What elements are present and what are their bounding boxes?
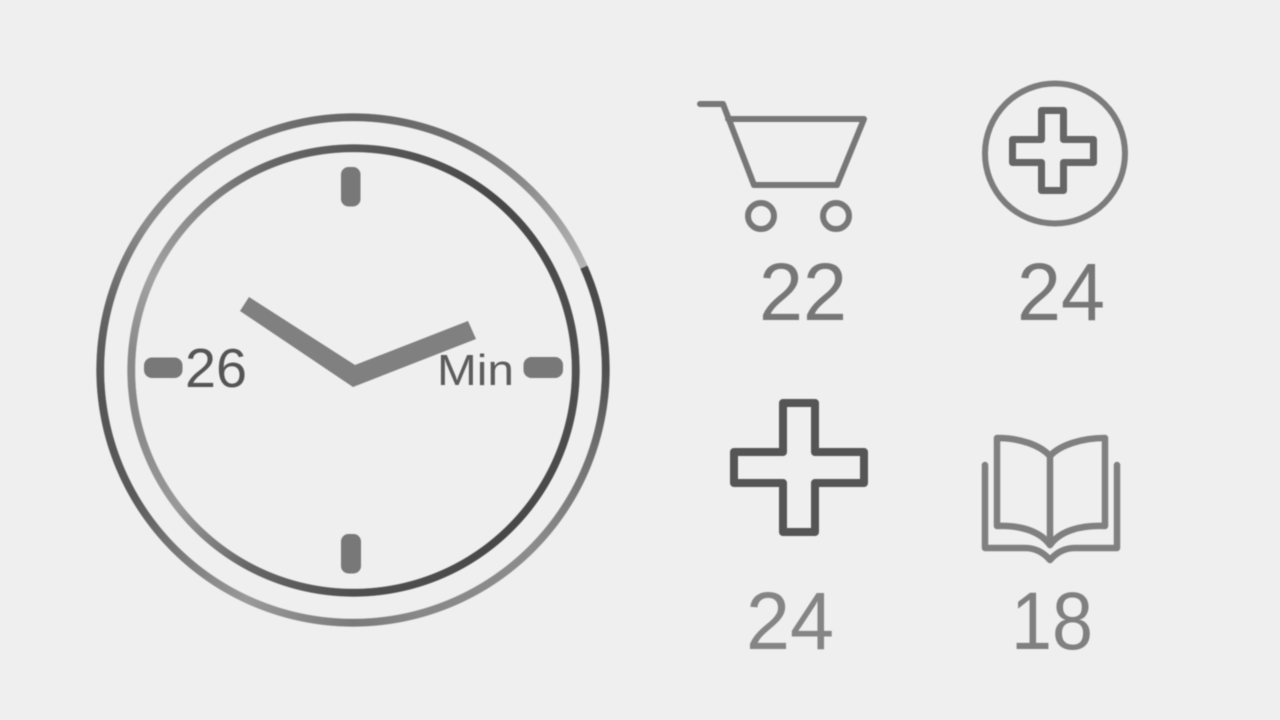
clock hands	[240, 297, 476, 387]
clock	[96, 112, 610, 628]
icon: shopping cart	[700, 104, 864, 229]
clock inner ring	[126, 144, 580, 596]
label: 26: 26	[185, 337, 247, 399]
value: 18: 18	[1011, 576, 1093, 667]
value: 22: 22	[759, 247, 847, 338]
value: 24 bottom: 24	[746, 576, 834, 667]
hour ticks	[144, 167, 563, 574]
icon: open book	[985, 438, 1117, 560]
label: Min: Min	[437, 346, 514, 395]
value: 24 top: 24	[1017, 247, 1105, 338]
icon: plus in circle	[985, 84, 1125, 224]
clock face	[143, 166, 564, 574]
infographic canvas	[96, 80, 1129, 651]
clock outer ring	[96, 113, 610, 627]
icon: plus	[734, 403, 864, 532]
